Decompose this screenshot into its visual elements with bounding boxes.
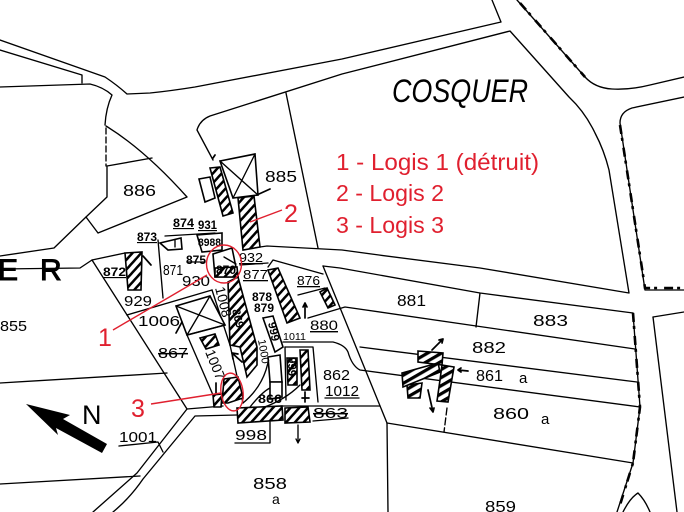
callout 3: Logis 3 bbox=[131, 372, 246, 423]
parcel numbers: 931 bbox=[198, 220, 218, 232]
parcel numbers: 863 bbox=[313, 405, 348, 422]
parcel numbers: 1001 bbox=[119, 429, 157, 446]
parcel numbers: 878 bbox=[252, 292, 273, 304]
place name: E R (truncated) bbox=[0, 254, 62, 287]
buildings: central cluster bbox=[263, 316, 310, 402]
parcel numbers: 873 bbox=[137, 232, 157, 244]
parcel numbers: 862 bbox=[323, 367, 350, 384]
building: Logis 3 bbox=[213, 377, 243, 407]
parcel numbers: 1006 bbox=[138, 313, 180, 330]
parcel numbers: 876 bbox=[297, 273, 320, 288]
callout 2: Logis 2: 2 bbox=[284, 200, 298, 228]
parcel numbers: 881 bbox=[397, 293, 426, 310]
parcel numbers: 886 bbox=[123, 183, 156, 200]
parcel numbers: 1007 bbox=[202, 347, 229, 382]
parcel numbers: a bbox=[519, 370, 528, 387]
parcel numbers: 861 bbox=[476, 368, 503, 385]
parcel numbers: 999 bbox=[285, 357, 297, 376]
parcel numbers: 858 bbox=[253, 476, 287, 493]
parcel numbers: 885 bbox=[265, 169, 297, 186]
parcel numbers: 929 bbox=[124, 293, 152, 310]
building: parcel 1007 bbox=[200, 334, 219, 349]
legend: dwellings: 2 - Logis 2 bbox=[336, 180, 444, 206]
building: parcel 1006 house bbox=[176, 296, 225, 335]
building: parcel 929 bbox=[125, 252, 151, 290]
parcel numbers: 869 bbox=[229, 308, 245, 329]
legend: dwellings bbox=[336, 149, 539, 238]
parcel numbers: 879 bbox=[254, 303, 274, 315]
parcel numbers: 999 bbox=[265, 321, 281, 342]
title: COSQUER: COSQUER bbox=[392, 73, 528, 109]
parcel numbers: 874 bbox=[173, 218, 195, 230]
parcel numbers: a bbox=[272, 491, 280, 507]
parcel numbers: 880 bbox=[310, 317, 338, 333]
parcel numbers: 875 bbox=[186, 255, 207, 267]
parcel numbers: 1011 bbox=[283, 332, 306, 343]
north arrow bbox=[26, 400, 107, 453]
parcel numbers bbox=[0, 169, 568, 512]
parcel numbers: 871 bbox=[163, 262, 183, 279]
legend: dwellings: 1 - Logis 1 (détruit) bbox=[336, 149, 539, 175]
buildings: parcels 873, 874, 931 bbox=[160, 233, 222, 252]
legend: dwellings: 3 - Logis 3 bbox=[336, 212, 444, 238]
parcel numbers: 998 bbox=[235, 427, 267, 444]
building: long range bbox=[228, 277, 257, 377]
callout 1: Logis 1: 1 bbox=[98, 324, 112, 352]
parcel numbers: 883 bbox=[533, 313, 568, 330]
parcel numbers: 855 bbox=[0, 318, 27, 335]
parcel numbers: 860 bbox=[493, 406, 529, 423]
buildings: parcels 873, 874, 931: 8988 bbox=[198, 237, 221, 249]
parcel numbers: 867 bbox=[158, 345, 188, 362]
parcel numbers: 872 bbox=[103, 267, 126, 279]
building: east group at parcel 861 bbox=[402, 339, 468, 412]
parcel numbers: 1012 bbox=[325, 383, 359, 400]
buildings: parcels 877, 876 bbox=[268, 268, 335, 323]
callout 3: Logis 3: 3 bbox=[131, 395, 145, 423]
parcel numbers: 866 bbox=[258, 394, 282, 406]
parcel numbers: 1008 bbox=[212, 285, 235, 319]
callout 1: Logis 1 bbox=[98, 245, 242, 352]
buildings: parcels 998 and 863 bbox=[237, 406, 310, 443]
place name: E R (truncated): R bbox=[40, 254, 62, 287]
parcel numbers: a bbox=[541, 411, 550, 428]
parcel numbers: 870 bbox=[216, 265, 236, 277]
building: Logis 1 site bbox=[213, 248, 238, 277]
parcel numbers: 1000 bbox=[255, 338, 271, 365]
parcel numbers: 882 bbox=[472, 340, 506, 357]
callout 2: Logis 2 bbox=[250, 200, 298, 228]
building: Logis 2 bbox=[238, 196, 260, 250]
parcel numbers: 932 bbox=[239, 250, 263, 265]
north arrow: N bbox=[82, 400, 102, 430]
parcel numbers: 877 bbox=[243, 267, 268, 282]
parcel numbers: 930 bbox=[182, 273, 210, 290]
building: parcel 885 house bbox=[199, 154, 270, 216]
